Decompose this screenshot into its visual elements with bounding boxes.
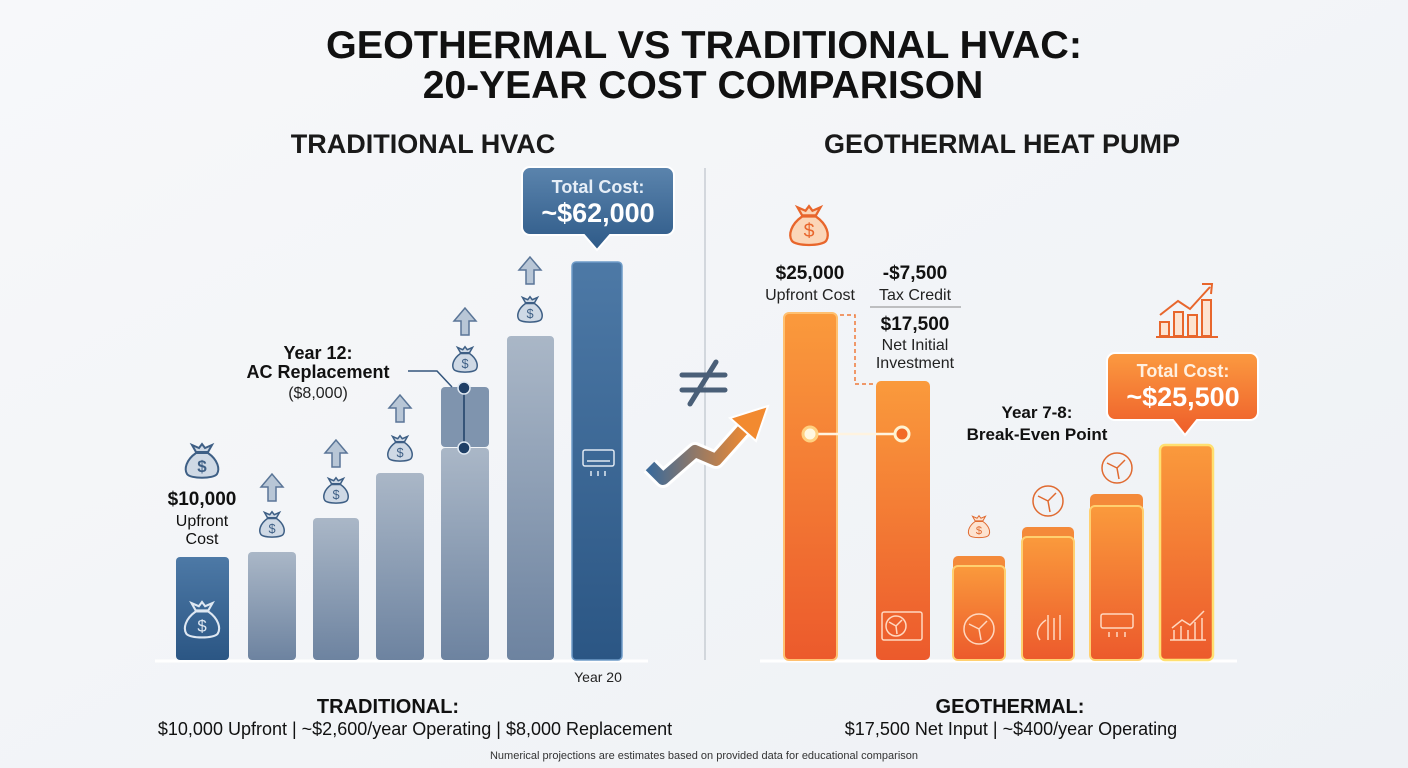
callout: total cost geothermal: ~$25,500: [1126, 382, 1240, 412]
text: upfront cost traditional: Cost: [186, 531, 219, 548]
callout: ac replacement: AC Replacement: [246, 362, 390, 382]
heading: geothermal heat pump: GEOTHERMAL HEAT PUMP: [824, 129, 1180, 159]
text: geothermal upfront and tax credit: [765, 263, 961, 384]
summary: geothermal: $17,500 Net Input | ~$400/year Operating: [845, 719, 1177, 739]
text: geothermal upfront and tax credit: $25,000: [776, 263, 844, 284]
summary: traditional: [158, 696, 672, 739]
text: upfront cost traditional: [168, 489, 236, 548]
title: 20-YEAR COST COMPARISON: [423, 64, 983, 107]
text: geothermal upfront and tax credit: Tax Credit: [879, 287, 952, 304]
callout: total cost geothermal: Total Cost:: [1137, 361, 1229, 381]
arrow: trend squiggle: [650, 406, 768, 479]
text: geothermal upfront and tax credit: Net Initial: [882, 337, 948, 354]
icon: growth chart: [1156, 284, 1218, 337]
title: [326, 24, 1082, 107]
icons above small bars: [968, 453, 1132, 538]
money bags and arrows traditional: $: [197, 457, 207, 476]
icon: big money bag orange: [790, 206, 828, 245]
icons above small bars: $: [976, 525, 982, 537]
callout: ac replacement: Year 12:: [283, 343, 353, 363]
callout: break-even: [803, 403, 1108, 444]
icon: big money bag orange: $: [804, 220, 815, 242]
callout: break-even: Break-Even Point: [967, 425, 1108, 444]
summary: traditional: $10,000 Upfront | ~$2,600/year Operating | $8,000 Replacement: [158, 719, 672, 739]
text: upfront cost traditional: $10,000: [168, 489, 236, 510]
chart: traditional bars: Year 20: [574, 669, 622, 685]
icon: ac unit: [583, 450, 614, 476]
callout: ac replacement: [246, 343, 470, 454]
callout: total cost traditional: Total Cost:: [552, 177, 644, 197]
footer note: Numerical projections are estimates based on provided data for educational comparison: [490, 750, 918, 762]
icons inside orange bars: [882, 611, 1206, 644]
money bags and arrows traditional: [185, 297, 542, 637]
summary: geothermal: [845, 696, 1177, 739]
text: geothermal upfront and tax credit: Investment: [876, 355, 955, 372]
money bags and arrows traditional: $: [526, 306, 534, 321]
callout: ac replacement: ($8,000): [288, 385, 348, 402]
money bags and arrows traditional: $: [268, 521, 276, 536]
callout: total cost geothermal: [1107, 353, 1258, 435]
icon: not equal: [682, 362, 725, 404]
text: upfront cost traditional: Upfront: [176, 513, 229, 530]
money bags and arrows traditional: $: [332, 487, 340, 502]
money bags and arrows traditional: $: [461, 356, 469, 371]
title: GEOTHERMAL VS TRADITIONAL HVAC:: [326, 24, 1082, 67]
callout: total cost traditional: ~$62,000: [541, 198, 655, 228]
summary: traditional: TRADITIONAL:: [317, 696, 459, 718]
callout: total cost traditional: [522, 167, 674, 250]
money bags and arrows traditional: $: [197, 616, 207, 635]
text: geothermal upfront and tax credit: $17,500: [881, 314, 949, 335]
money bags and arrows traditional: $: [396, 445, 404, 460]
chart: geothermal bars: [760, 206, 1237, 661]
chart: traditional bars: [155, 262, 648, 685]
text: geothermal upfront and tax credit: Upfront Cost: [765, 287, 855, 304]
text: geothermal upfront and tax credit: -$7,500: [883, 263, 947, 284]
callout: break-even: Year 7-8:: [1002, 403, 1072, 422]
heading: traditional hvac: TRADITIONAL HVAC: [291, 129, 555, 159]
icon: up arrows: [261, 257, 541, 501]
summary: geothermal: GEOTHERMAL:: [936, 696, 1084, 718]
